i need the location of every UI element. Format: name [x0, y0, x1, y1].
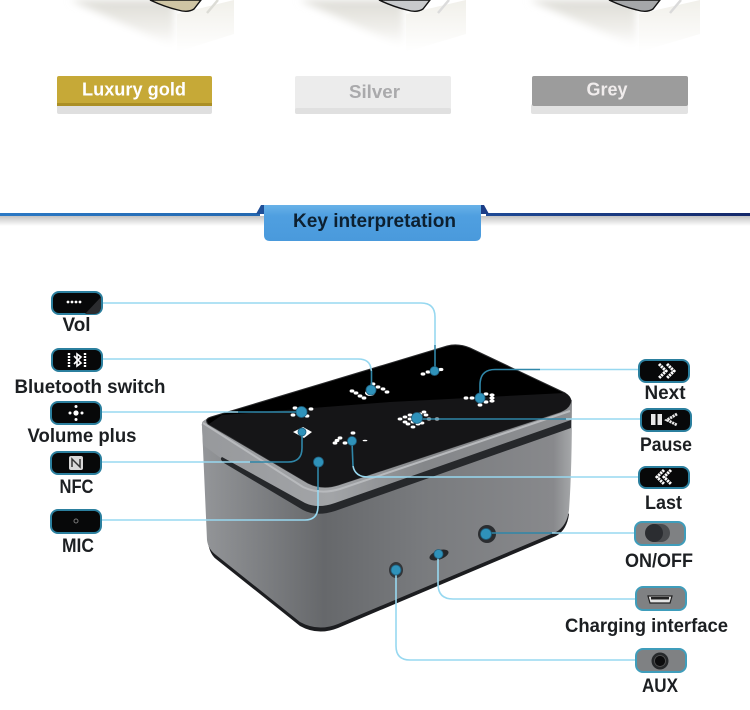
callout: AUX: AUX	[642, 676, 678, 697]
callout: ON/OFF	[625, 522, 693, 572]
colour button: Silver	[295, 76, 451, 114]
callout: MIC	[51, 510, 101, 557]
callout: Vol	[52, 292, 102, 336]
section divider line	[0, 213, 750, 226]
callout: Last	[639, 467, 689, 514]
speaker device	[202, 345, 572, 632]
callout: Charging interface	[565, 587, 728, 637]
callout: AUX	[636, 649, 686, 697]
callout: Pause	[640, 409, 692, 456]
callout: Next	[639, 360, 689, 404]
callout: Vol: Vol	[62, 315, 90, 336]
product reflection: silver	[299, 0, 466, 52]
glass top panel	[207, 345, 571, 487]
front ports	[389, 525, 496, 578]
device lid band	[202, 348, 572, 507]
callout: MIC: MIC	[62, 536, 94, 557]
product reflection: gold	[70, 0, 234, 52]
colour button: Grey	[531, 76, 688, 114]
product reflection: grey	[529, 0, 700, 52]
device base	[207, 504, 569, 632]
callout connector lines	[101, 303, 641, 660]
callout: Pause: Pause	[640, 435, 692, 456]
callout: Bluetooth switch: Bluetooth switch	[14, 377, 166, 398]
callout: Bluetooth switch	[14, 349, 166, 398]
callout: NFC	[51, 452, 101, 498]
colour button: Grey: Grey	[586, 80, 628, 100]
colour button: Luxury gold: Luxury gold	[82, 80, 186, 100]
colour button: Silver: Silver	[349, 82, 400, 102]
colour button: Luxury gold	[57, 76, 212, 114]
callout: NFC: NFC	[60, 477, 94, 498]
callout: Charging interface: Charging interface	[565, 616, 728, 637]
device body	[202, 348, 572, 628]
callout: Last: Last	[645, 493, 683, 514]
callout: ON/OFF: ON/OFF	[625, 551, 693, 572]
section heading ribbon	[256, 205, 489, 241]
button icon dots on glass	[291, 368, 495, 445]
callout target dots	[296, 366, 492, 575]
callout: Volume plus: Volume plus	[28, 426, 136, 447]
callout: Volume plus	[28, 402, 136, 447]
section heading ribbon: Key interpretation	[293, 211, 456, 232]
callout: Next: Next	[644, 383, 686, 404]
